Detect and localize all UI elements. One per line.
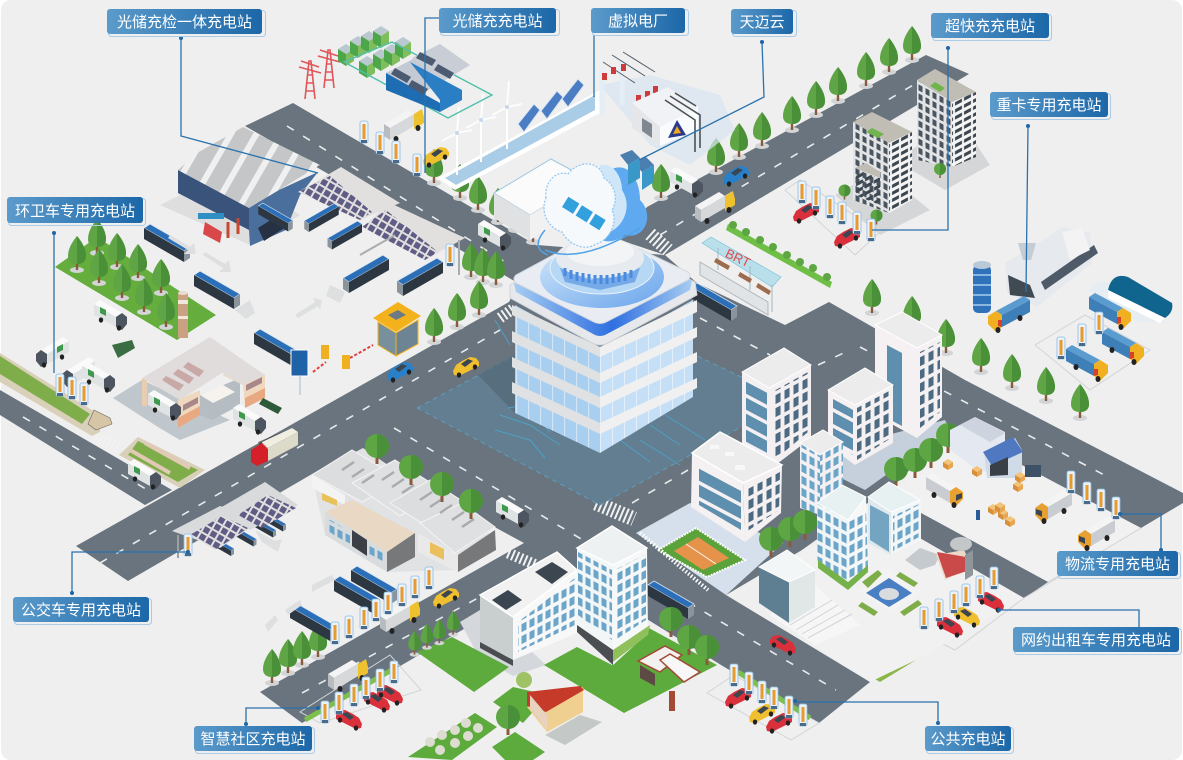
tall office center bbox=[742, 348, 811, 470]
cloud icon bbox=[538, 164, 647, 255]
grey corner building bbox=[759, 550, 860, 645]
bus yard arrows bbox=[168, 235, 345, 632]
hedges behind chargers bbox=[305, 668, 810, 720]
crosswalks bbox=[96, 234, 668, 565]
label: 虚拟电厂: 虚拟电厂 bbox=[608, 13, 668, 30]
lawn: lower left median bbox=[119, 437, 205, 488]
glass office bbox=[817, 485, 868, 590]
tower floor bands bbox=[512, 300, 697, 434]
restaurant bbox=[496, 672, 602, 745]
small blue office bbox=[800, 430, 843, 515]
park trees and gas station bbox=[408, 607, 719, 711]
guard booth and parking sign bbox=[291, 302, 421, 395]
glowing top plate bbox=[510, 232, 697, 345]
factory complex bbox=[312, 448, 496, 572]
buildings: central city block bbox=[636, 312, 950, 595]
bus solar canopies bbox=[298, 167, 465, 275]
sanitation trucks bbox=[36, 167, 703, 528]
label: 超快充充电站: 超快充充电站 bbox=[945, 18, 1035, 35]
tree lawn bbox=[55, 237, 216, 340]
fountain bbox=[857, 568, 922, 616]
trees bbox=[68, 26, 1089, 686]
label: 天迈云: 天迈云 bbox=[739, 14, 785, 31]
lawns lower bbox=[408, 627, 916, 760]
circuit floor under tower bbox=[417, 310, 790, 505]
label: 网约出租车专用充电站 bbox=[1013, 627, 1182, 654]
label: 超快充充电站 bbox=[931, 13, 1052, 40]
BRT station bbox=[700, 221, 832, 315]
BRT station: BRT bbox=[723, 246, 753, 270]
round trees by factory bbox=[365, 434, 483, 519]
warehouse: PV storage inspection station bbox=[160, 127, 320, 246]
road centre dashes bbox=[23, 75, 1110, 693]
label: 智慧社区充电站 bbox=[194, 726, 314, 754]
kiosk and equipment bbox=[905, 537, 973, 580]
label: 虚拟电厂 bbox=[591, 8, 688, 36]
bus charging canopy bbox=[172, 482, 298, 558]
label: 光储充充电站 bbox=[439, 8, 560, 36]
front glass tower bbox=[577, 526, 650, 665]
chimney bbox=[178, 291, 188, 338]
twin glass office bbox=[868, 482, 921, 555]
label: 光储充充电站: 光储充充电站 bbox=[452, 13, 543, 30]
label: 公交车专用充电站: 公交车专用充电站 bbox=[21, 601, 141, 619]
label: 公交车专用充电站 bbox=[13, 597, 152, 624]
cars and trucks bbox=[328, 109, 1004, 734]
label: 网约出租车专用充电站: 网约出租车专用充电站 bbox=[1021, 632, 1171, 649]
white service building bbox=[494, 159, 590, 240]
basketball court bbox=[640, 528, 745, 590]
mid office bbox=[828, 368, 893, 465]
data center units bbox=[620, 150, 654, 190]
ground under white office bbox=[460, 610, 546, 676]
flowering shrubs bbox=[425, 718, 483, 755]
solar strip and wind farm bbox=[438, 79, 600, 190]
buildings: gray residential towers bbox=[835, 69, 990, 235]
buses bbox=[144, 203, 737, 641]
logistics yard bbox=[770, 417, 1141, 682]
tall office right bbox=[875, 312, 942, 438]
lawn: left strip bbox=[0, 353, 112, 436]
substation bbox=[600, 52, 735, 165]
label: 光储充检一体充电站 bbox=[107, 9, 266, 36]
label: 智慧社区充电站: 智慧社区充电站 bbox=[200, 730, 306, 748]
label: 重卡专用充电站: 重卡专用充电站 bbox=[996, 97, 1102, 114]
label: 光储充检一体充电站: 光储充检一体充电站 bbox=[117, 14, 252, 31]
factory logistics heavy truck station bbox=[973, 227, 1172, 382]
label: 物流专用充电站 bbox=[1057, 551, 1180, 578]
label: 环卫车专用充电站 bbox=[7, 197, 146, 226]
label: 物流专用充电站: 物流专用充电站 bbox=[1065, 556, 1170, 573]
glass rings and gear bbox=[540, 238, 664, 308]
tower body bbox=[515, 300, 693, 453]
label: 天迈云 bbox=[731, 9, 796, 36]
glass offices and plaza bbox=[328, 109, 1004, 755]
white solar office bbox=[480, 552, 577, 666]
power grid and battery station bbox=[299, 26, 492, 118]
label: 公共充电站 bbox=[925, 726, 1014, 754]
label: 环卫车专用充电站: 环卫车专用充电站 bbox=[15, 203, 135, 220]
charger groups bbox=[56, 121, 1120, 726]
garbage station building bbox=[113, 337, 265, 440]
label: 重卡专用充电站 bbox=[990, 92, 1110, 120]
red lorry bbox=[251, 428, 299, 466]
label: 公共充电站: 公共充电站 bbox=[930, 731, 1006, 748]
big front office bbox=[691, 432, 782, 542]
parking lot outlines bbox=[300, 180, 1150, 740]
central smart-energy tower bbox=[510, 150, 697, 453]
